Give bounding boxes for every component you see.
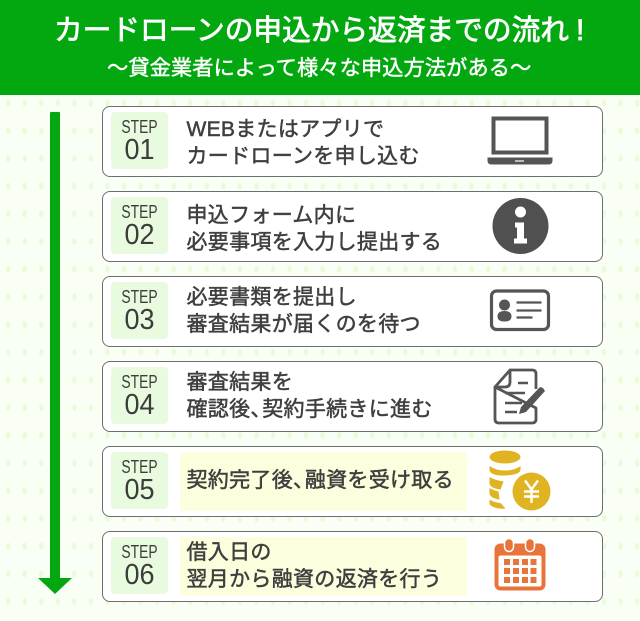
step 04 text: 確認後、契約手続きに進む — [186, 398, 433, 420]
step badge 04: STEP — [121, 372, 158, 392]
panel: step 06 — [102, 531, 603, 602]
step 06 text — [186, 540, 442, 590]
icon: information — [492, 198, 548, 254]
step badge 02: STEP — [121, 202, 158, 222]
title: カードローンの申込から返済までの流れ! — [54, 14, 584, 47]
icon: document and pen — [494, 368, 545, 424]
step badge 01: STEP — [121, 117, 158, 137]
icon: coins and yen — [490, 450, 550, 510]
step badge 01: 01 — [124, 134, 154, 166]
icon: laptop — [488, 116, 552, 164]
step 06 text: 翌月から融資の返済を行う — [186, 568, 442, 590]
step 04 text: 審査結果を — [186, 371, 293, 394]
panel: step 02 — [102, 191, 603, 262]
panel: step 01 — [102, 106, 603, 177]
step badge 05: 05 — [124, 474, 154, 506]
step 06 text: 借入日の — [186, 541, 272, 564]
step 02 text: 申込フォーム内に — [186, 204, 356, 227]
step 02 text — [186, 204, 442, 254]
step 01 text: WEBまたはアプリで — [186, 118, 384, 141]
panel: step 03 — [102, 276, 603, 347]
step badge 03 — [111, 282, 168, 339]
step badge 05 — [111, 452, 168, 509]
step 03 text — [186, 286, 421, 336]
step 03 text: 審査結果が届くのを待つ — [186, 312, 421, 336]
step badge 05: STEP — [121, 457, 158, 477]
icon: calendar — [494, 539, 546, 590]
subtitle: 〜貸金業者によって様々な申込方法がある〜 — [107, 56, 531, 80]
step 05 text: 契約完了後、融資を受け取る — [186, 468, 454, 492]
step badge 01 — [111, 112, 168, 169]
arrow: flow downward — [38, 112, 72, 594]
step badge 06: STEP — [121, 542, 158, 562]
step badge 03: STEP — [121, 287, 158, 307]
step badge 06: 06 — [124, 559, 154, 591]
step badge 06 — [111, 537, 168, 594]
header band — [0, 0, 640, 95]
step 02 text: 必要事項を入力し提出する — [186, 230, 442, 254]
step 01 text — [186, 118, 420, 168]
step badge 02: 02 — [124, 219, 154, 251]
step 03 text: 必要書類を提出し — [186, 286, 357, 309]
panel: step 05 — [102, 446, 603, 517]
step badge 02 — [111, 197, 168, 254]
highlight background — [180, 452, 466, 510]
step badge 04 — [111, 367, 168, 424]
step 01 text: カードローンを申し込む — [186, 144, 420, 168]
step badge 03: 03 — [124, 304, 154, 336]
icon: ID card — [490, 289, 550, 332]
step 04 text — [186, 370, 433, 420]
panel: step 04 — [102, 361, 603, 432]
highlight background — [180, 536, 466, 596]
step badge 04: 04 — [124, 389, 154, 421]
